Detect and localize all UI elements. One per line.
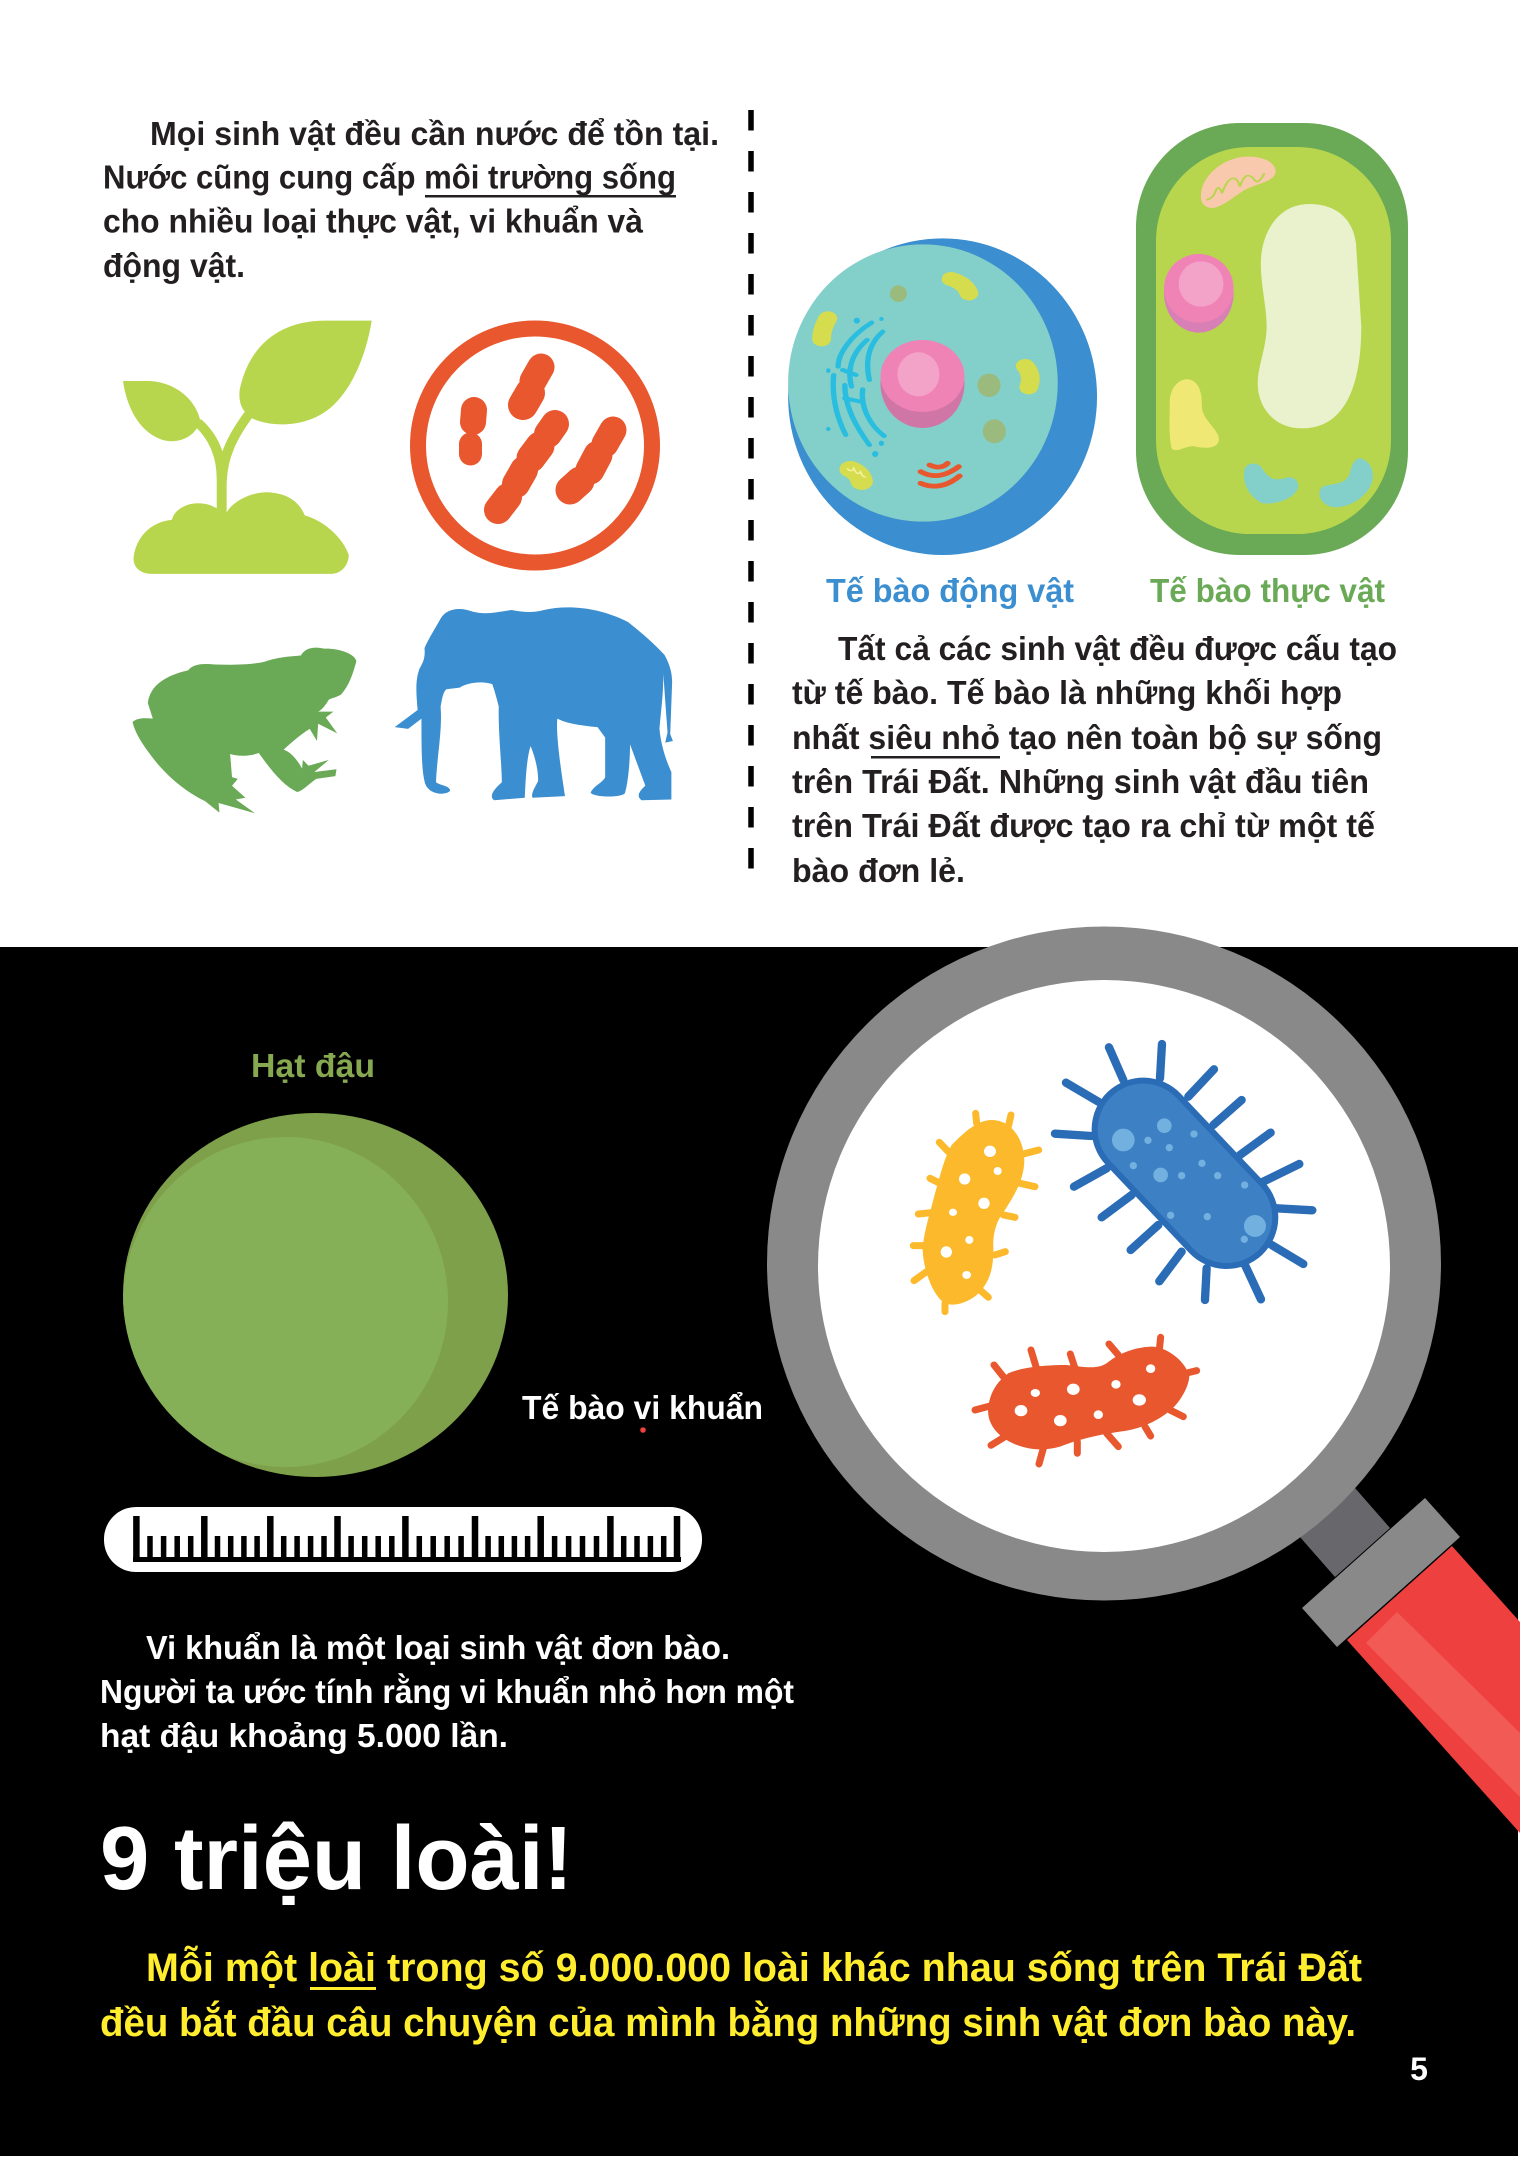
callout: yellow text: đều bắt đầu câu chuyện của mình bằng những sinh vật đơn bào này. xyxy=(100,1999,1356,2045)
icon: elephant silhouette xyxy=(395,607,673,800)
icon: blue bacterium xyxy=(1055,1044,1312,1300)
text block: water intro xyxy=(103,115,719,284)
text block: cells explanation: bào đơn lẻ. xyxy=(792,852,965,889)
text block: bacteria size: Vi khuẩn là một loại sinh vật đơn bào. xyxy=(146,1629,730,1666)
text block: cells explanation: từ tế bào. Tế bào là những khối hợp xyxy=(792,674,1342,711)
panel: black lower section xyxy=(0,947,1518,2156)
icon: frog silhouette xyxy=(133,648,356,813)
text block: cells explanation: trên Trái Đất được tạo ra chỉ từ một tế xyxy=(792,807,1376,844)
text block: cells explanation xyxy=(792,630,1397,889)
text block: water intro: cho nhiều loại thực vật, vi khuẩn và xyxy=(103,202,644,240)
text block: bacteria size xyxy=(100,1629,794,1754)
text block: bacteria size: Người ta ước tính rằng vi khuẩn nhỏ hơn một xyxy=(100,1673,794,1710)
text block: water intro: động vật. xyxy=(103,247,245,284)
label: plant cell: Tế bào thực vật xyxy=(1150,572,1385,609)
icon: sprout xyxy=(123,321,372,574)
icon: plant cell xyxy=(1136,123,1408,555)
icon: red bacterium xyxy=(975,1337,1197,1464)
text block: cells explanation: nhất siêu nhỏ tạo nên toàn bộ sự sống xyxy=(792,719,1382,756)
text block: water intro: Nước cũng cung cấp môi trường sống xyxy=(103,158,676,196)
callout: yellow text: Mỗi một loài trong số 9.000.000 loài khác nhau sống trên Trái Đất xyxy=(146,1944,1362,1990)
page number: 5 xyxy=(1410,2051,1428,2087)
heading: 9 million species: 9 triệu loài! xyxy=(100,1809,573,1909)
text block: cells explanation: trên Trái Đất. Những sinh vật đầu tiên xyxy=(792,763,1369,800)
icon: ruler xyxy=(104,1507,702,1572)
label: pea: Hạt đậu xyxy=(251,1047,375,1084)
label: bacteria cell: Tế bào vi khuẩn xyxy=(522,1389,763,1426)
dashed divider xyxy=(748,110,754,870)
icon: yellow bacterium xyxy=(913,1113,1039,1312)
icon: magnifying glass xyxy=(767,926,1520,1833)
text block: bacteria size: hạt đậu khoảng 5.000 lần. xyxy=(100,1717,508,1754)
icon: bacteria in circle xyxy=(418,328,652,562)
icon: pea xyxy=(123,1113,508,1477)
label: animal cell: Tế bào động vật xyxy=(826,572,1074,609)
text block: water intro: Mọi sinh vật đều cần nước để tồn tại. xyxy=(150,115,719,152)
text block: cells explanation: Tất cả các sinh vật đều được cấu tạo xyxy=(838,630,1397,667)
icon: bacterium red dot xyxy=(640,1427,646,1433)
callout: yellow text xyxy=(100,1944,1362,2045)
icon: animal cell xyxy=(788,238,1097,555)
